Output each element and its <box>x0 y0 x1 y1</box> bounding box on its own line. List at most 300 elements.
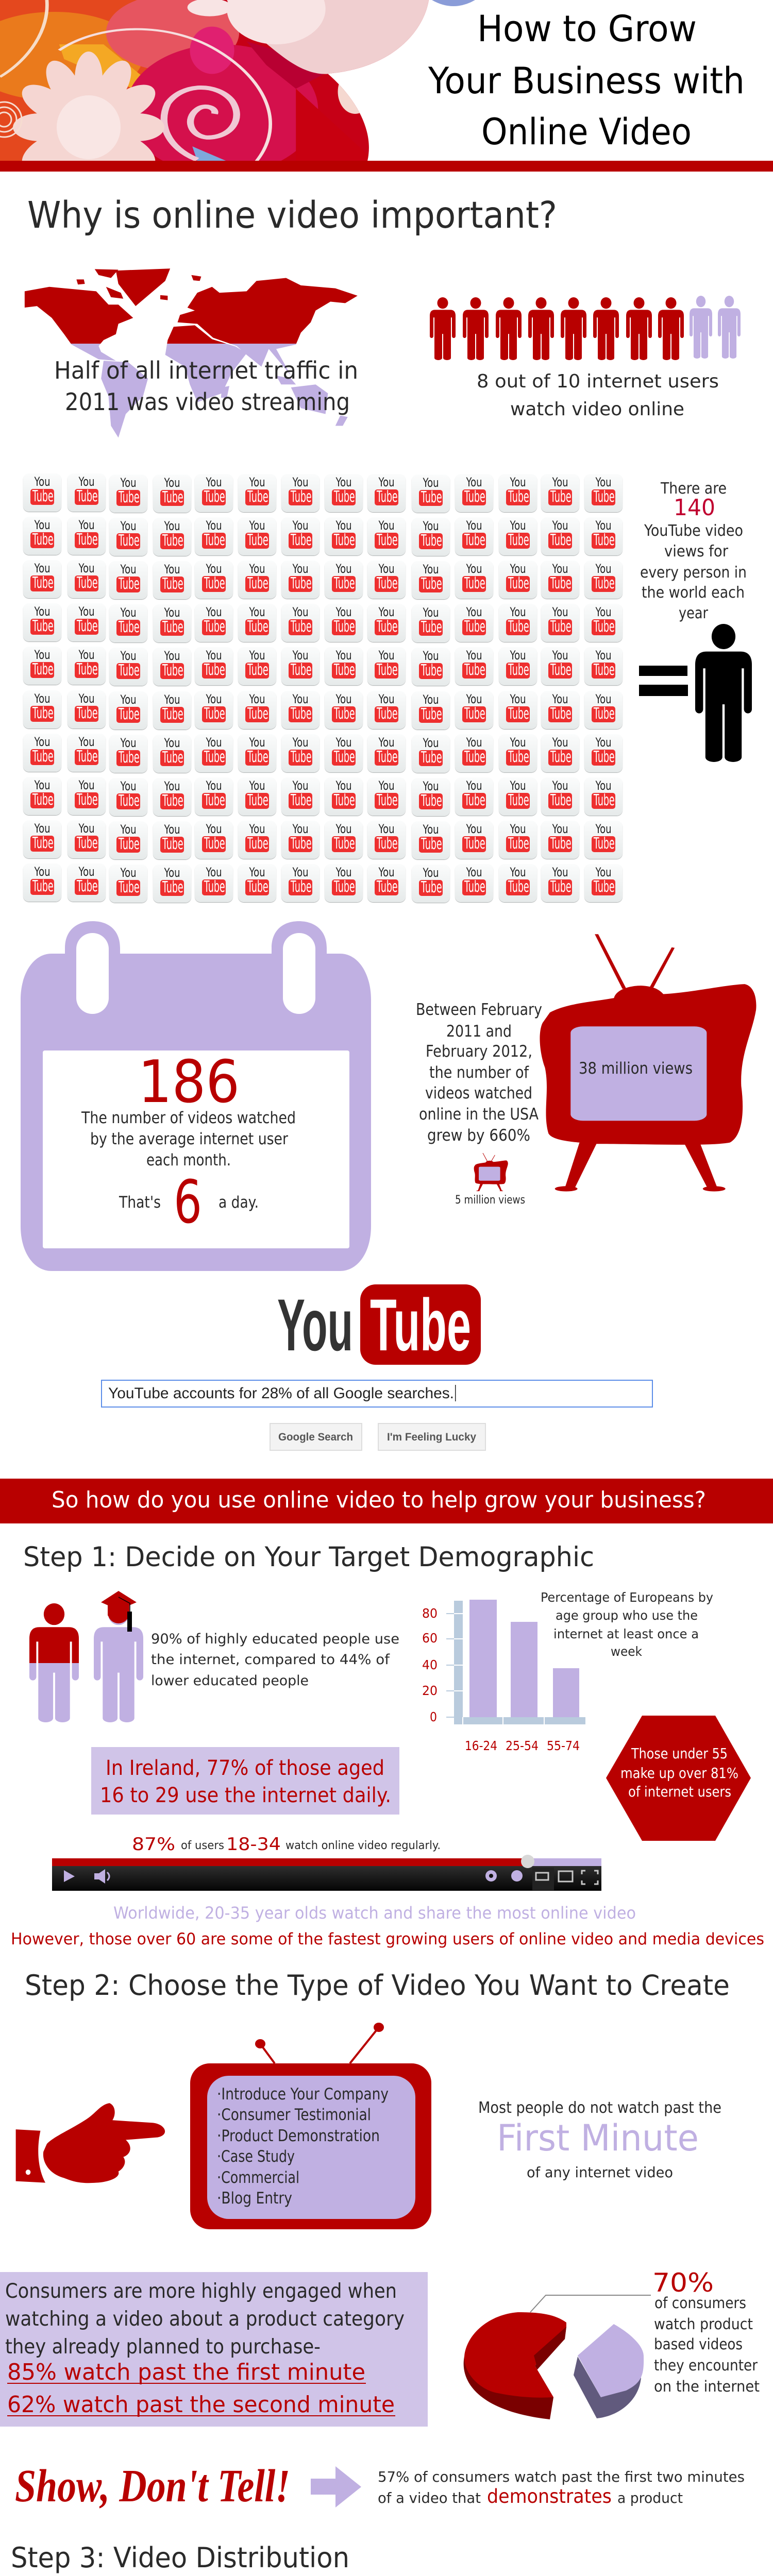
icon grid: 140 YouTube icons: Tube <box>421 532 442 550</box>
icon grid: 140 YouTube icons: Tube <box>334 705 355 723</box>
panel: calendar 186 videos: 6 <box>174 1168 202 1237</box>
icon grid: 140 YouTube icons: Tube <box>162 878 183 896</box>
icon grid: 140 YouTube icons: You <box>120 519 137 533</box>
icon grid: 140 YouTube icons: You <box>378 735 395 750</box>
icon grid: 140 YouTube icons: Tube <box>32 487 54 505</box>
icon grid: 140 YouTube icons: You <box>510 735 526 750</box>
icon grid: 140 YouTube icons: You <box>120 866 137 880</box>
icon grid: 140 YouTube icons: You <box>206 865 222 879</box>
icon: big TV 38 million views <box>540 934 756 1192</box>
panel: TV video types list <box>190 2023 431 2229</box>
icon grid: 140 YouTube icons: Tube <box>421 488 442 506</box>
icon grid: 140 YouTube icons: You <box>595 822 612 836</box>
icon grid: 140 YouTube icons: You <box>206 735 222 750</box>
icon grid: 140 YouTube icons <box>23 474 623 904</box>
icon grid: 140 YouTube icons: Tube <box>594 661 615 679</box>
icon grid: 140 YouTube icons: You <box>552 648 568 663</box>
icon grid: 140 YouTube icons: You <box>423 562 439 577</box>
icon grid: 140 YouTube icons: You <box>335 518 352 533</box>
icon grid: 140 YouTube icons: You <box>164 779 180 793</box>
icon: lower educated person <box>29 1603 79 1722</box>
icon grid: 140 YouTube icons: You <box>34 474 51 489</box>
icon grid: 140 YouTube icons: You <box>292 518 309 533</box>
icon grid: 140 YouTube icons: You <box>552 562 568 576</box>
icon grid: 140 YouTube icons: You <box>206 648 222 663</box>
callout: first minute: Most people do not watch past the <box>478 2099 721 2117</box>
text: growth 660 percent: videos watched <box>425 1084 532 1103</box>
icon grid: 140 YouTube icons: Tube <box>508 531 529 549</box>
icon: big TV 38 million views: 38 million views <box>579 1059 693 1078</box>
icon grid: 140 YouTube icons: Tube <box>32 791 54 809</box>
icon grid: 140 YouTube icons: You <box>423 736 439 750</box>
icon grid: 140 YouTube icons: Tube <box>334 835 355 853</box>
icon grid: 140 YouTube icons: You <box>510 562 526 576</box>
header artwork <box>0 0 429 161</box>
icon grid: 140 YouTube icons: You <box>423 519 439 533</box>
icon grid: 140 YouTube icons: You <box>78 518 95 532</box>
icon grid: 140 YouTube icons: You <box>466 648 482 663</box>
icon grid: 140 YouTube icons: Tube <box>291 748 312 766</box>
icon grid: 140 YouTube icons: Tube <box>204 488 225 506</box>
icon grid: 140 YouTube icons: Tube <box>204 878 225 896</box>
icon grid: 140 YouTube icons: You <box>292 822 309 836</box>
icon grid: 140 YouTube icons: Tube <box>334 661 355 679</box>
chart caption: age group who use the <box>556 1608 698 1623</box>
icon grid: 140 YouTube icons: You <box>164 866 180 880</box>
icon grid: 140 YouTube icons: Tube <box>421 618 442 636</box>
text: over 60 fastest growing: However, those over 60 are some of the fastest growing users of online video and media devices <box>11 1930 764 1948</box>
icon grid: 140 YouTube icons: You <box>335 865 352 879</box>
icon grid: 140 YouTube icons: You <box>423 779 439 793</box>
text: highly educated: the internet, compared to 44% of <box>151 1652 391 1668</box>
text: 87 percent of users: of users <box>181 1839 224 1852</box>
icon grid: 140 YouTube icons: You <box>249 475 265 489</box>
icon grid: 140 YouTube icons: You <box>78 474 95 489</box>
icon grid: 140 YouTube icons: Tube <box>421 792 442 810</box>
icon grid: 140 YouTube icons: Tube <box>464 878 485 896</box>
icon grid: 140 YouTube icons: Tube <box>77 574 98 592</box>
icon grid: 140 YouTube icons: You <box>34 648 51 662</box>
icon grid: 140 YouTube icons: You <box>206 822 222 836</box>
icon grid: 140 YouTube icons: Tube <box>291 488 312 506</box>
text: 70 percent of consumers: 70% <box>652 2268 714 2298</box>
icon: graduate person <box>94 1591 143 1722</box>
icon grid: 140 YouTube icons: Tube <box>32 748 54 766</box>
callout: Ireland internet use <box>91 1747 399 1815</box>
icon grid: 140 YouTube icons: Tube <box>377 488 398 506</box>
icon grid: 140 YouTube icons: Tube <box>162 488 183 506</box>
icon grid: 140 YouTube icons: Tube <box>377 618 398 636</box>
icon grid: 140 YouTube icons: Tube <box>421 878 442 896</box>
chart caption: week <box>611 1644 642 1659</box>
icon grid: 140 YouTube icons: Tube <box>162 662 183 680</box>
text: growth 660 percent <box>416 1001 542 1145</box>
icon grid: 140 YouTube icons: Tube <box>334 878 355 896</box>
icon grid: 140 YouTube icons: Tube <box>119 705 140 723</box>
icon grid: 140 YouTube icons: You <box>206 778 222 793</box>
panel: TV video types list: ·Product Demonstration <box>217 2127 380 2145</box>
icon grid: 140 YouTube icons: You <box>206 475 222 489</box>
icon grid: 140 YouTube icons: Tube <box>77 617 98 635</box>
text: growth 660 percent: online in the USA <box>419 1105 539 1124</box>
chart caption: internet at least once a <box>553 1626 699 1641</box>
icon grid: 140 YouTube icons: You <box>34 518 51 532</box>
icon grid: 140 YouTube icons: You <box>335 648 352 663</box>
icon grid: 140 YouTube icons: You <box>78 865 95 879</box>
icon grid: 140 YouTube icons: You <box>595 865 612 879</box>
callout: 140 views per person: There are <box>660 480 727 498</box>
icon grid: 140 YouTube icons: Tube <box>550 531 572 549</box>
icon grid: 140 YouTube icons: Tube <box>550 791 572 809</box>
text: 70 percent of consumers: watch product <box>654 2315 753 2333</box>
text: worldwide 20-35: Worldwide, 20-35 year olds watch and share the most online video <box>113 1903 636 1923</box>
chart caption <box>541 1590 713 1659</box>
icon grid: 140 YouTube icons: You <box>120 779 137 793</box>
icon grid: 140 YouTube icons: Tube <box>334 488 355 506</box>
icon grid: 140 YouTube icons: You <box>466 605 482 619</box>
title: Your Business with <box>428 60 745 102</box>
bar chart: Europeans by age group: 55-74 <box>547 1738 580 1753</box>
icon grid: 140 YouTube icons: You <box>120 649 137 663</box>
panel: TV video types list: ·Introduce Your Company <box>217 2085 389 2104</box>
icon grid: 140 YouTube icons: Tube <box>421 705 442 723</box>
button: Google Search: Google Search <box>278 1431 353 1443</box>
icon grid: 140 YouTube icons: Tube <box>119 835 140 853</box>
header red rule <box>0 161 773 172</box>
button: Google Search <box>270 1423 362 1450</box>
icon grid: 140 YouTube icons: Tube <box>594 705 615 723</box>
icon grid: 140 YouTube icons: You <box>292 605 309 619</box>
icon grid: 140 YouTube icons: Tube <box>464 705 485 723</box>
icon grid: 140 YouTube icons: You <box>206 692 222 706</box>
logo: YouTube: You <box>277 1284 353 1366</box>
icon grid: 140 YouTube icons: You <box>552 778 568 793</box>
icon grid: 140 YouTube icons: Tube <box>594 531 615 549</box>
icon grid: 140 YouTube icons: Tube <box>32 617 54 635</box>
icon grid: 140 YouTube icons: Tube <box>247 835 268 853</box>
panel: 8 out of 10 people: watch video online <box>510 399 684 420</box>
text: 87 percent of users: watch online video regularly. <box>285 1839 441 1852</box>
bar chart: Europeans by age group: 0 <box>430 1709 437 1724</box>
icon grid: 140 YouTube icons: Tube <box>119 575 140 593</box>
icon: small TV 5 million views: 5 million views <box>455 1194 525 1207</box>
icon grid: 140 YouTube icons: You <box>206 605 222 619</box>
logo: YouTube: Tube <box>370 1284 471 1366</box>
icon grid: 140 YouTube icons: Tube <box>550 748 572 766</box>
icon grid: 140 YouTube icons: You <box>34 865 51 879</box>
icon grid: 140 YouTube icons: You <box>249 518 265 533</box>
icon grid: 140 YouTube icons: You <box>34 561 51 575</box>
icon grid: 140 YouTube icons: Tube <box>247 878 268 896</box>
text: 70 percent of consumers: they encounter <box>654 2357 758 2374</box>
icon grid: 140 YouTube icons: You <box>378 518 395 533</box>
heading: step 1: Step 1: Decide on Your Target Demographic <box>23 1541 594 1573</box>
callout: 140 views per person: views for <box>664 543 729 561</box>
icon grid: 140 YouTube icons: You <box>510 778 526 793</box>
icon grid: 140 YouTube icons: You <box>595 692 612 706</box>
icon grid: 140 YouTube icons: Tube <box>377 531 398 549</box>
icon grid: 140 YouTube icons: Tube <box>247 618 268 636</box>
icon: small TV 5 million views <box>455 1153 525 1207</box>
icon grid: 140 YouTube icons: You <box>292 735 309 750</box>
callout: hexagon under 55: Those under 55 <box>631 1745 728 1762</box>
icon grid: 140 YouTube icons: You <box>249 648 265 663</box>
icon grid: 140 YouTube icons: Tube <box>594 791 615 809</box>
icon grid: 140 YouTube icons: Tube <box>550 488 572 506</box>
panel: TV video types list: ·Consumer Testimonial <box>217 2106 371 2124</box>
icon grid: 140 YouTube icons: Tube <box>291 835 312 853</box>
icon grid: 140 YouTube icons: Tube <box>464 574 485 592</box>
icon grid: 140 YouTube icons: You <box>249 735 265 750</box>
icon grid: 140 YouTube icons: You <box>292 865 309 879</box>
icon grid: 140 YouTube icons: Tube <box>162 792 183 810</box>
bar chart: Europeans by age group: 60 <box>422 1631 438 1646</box>
heading: why is online video important: Why is online video important? <box>27 194 557 236</box>
icon grid: 140 YouTube icons: You <box>552 692 568 706</box>
icon grid: 140 YouTube icons: You <box>335 692 352 706</box>
panel: engagement stats: 62% watch past the second minute <box>7 2392 395 2418</box>
panel: calendar 186 videos: The number of videos watched <box>81 1109 296 1127</box>
icon grid: 140 YouTube icons: Tube <box>464 488 485 506</box>
icon grid: 140 YouTube icons: You <box>378 648 395 663</box>
icon grid: 140 YouTube icons: Tube <box>247 661 268 679</box>
title: Online Video <box>481 111 692 153</box>
icon grid: 140 YouTube icons: Tube <box>334 748 355 766</box>
icon: pointing hand <box>16 2103 165 2183</box>
panel: world map half of traffic: Half of all internet traffic in <box>54 357 358 384</box>
icon grid: 140 YouTube icons: You <box>164 736 180 750</box>
icon grid: 140 YouTube icons: You <box>34 604 51 619</box>
icon grid: 140 YouTube icons: Tube <box>464 531 485 549</box>
icon grid: 140 YouTube icons: You <box>510 822 526 836</box>
icon grid: 140 YouTube icons: Tube <box>247 574 268 592</box>
bar chart: Europeans by age group: 16-24 <box>465 1738 497 1753</box>
icon grid: 140 YouTube icons: Tube <box>32 574 54 592</box>
icon grid: 140 YouTube icons: You <box>206 562 222 576</box>
callout: first minute: of any internet video <box>527 2164 673 2181</box>
icon grid: 140 YouTube icons: Tube <box>162 532 183 550</box>
text: highly educated: lower educated people <box>151 1673 309 1689</box>
icon grid: 140 YouTube icons: You <box>466 865 482 879</box>
pie chart: 70 percent <box>464 2295 651 2419</box>
icon grid: 140 YouTube icons: Tube <box>377 748 398 766</box>
panel: calendar 186 videos: a day. <box>219 1193 259 1212</box>
icon grid: 140 YouTube icons: You <box>335 778 352 793</box>
icon grid: 140 YouTube icons: Tube <box>594 748 615 766</box>
icon grid: 140 YouTube icons: You <box>423 476 439 490</box>
icon grid: 140 YouTube icons: Tube <box>247 705 268 723</box>
icon grid: 140 YouTube icons: You <box>206 518 222 533</box>
icon grid: 140 YouTube icons: Tube <box>119 878 140 896</box>
text: growth 660 percent: Between February <box>416 1001 542 1019</box>
callout: hexagon under 55: of internet users <box>628 1783 731 1800</box>
icon grid: 140 YouTube icons: You <box>595 518 612 533</box>
callout: first minute: First Minute <box>497 2117 699 2159</box>
button: I'm Feeling Lucky: I'm Feeling Lucky <box>387 1431 476 1443</box>
icon grid: 140 YouTube icons: Tube <box>204 705 225 723</box>
icon grid: 140 YouTube icons: You <box>595 562 612 576</box>
text: 57 percent demonstrates: demonstrates <box>487 2485 612 2507</box>
icon grid: 140 YouTube icons: You <box>335 562 352 576</box>
icon grid: 140 YouTube icons: Tube <box>77 487 98 505</box>
icon grid: 140 YouTube icons: Tube <box>464 618 485 636</box>
icon grid: 140 YouTube icons: You <box>378 562 395 576</box>
icon grid: 140 YouTube icons: You <box>595 648 612 663</box>
icon grid: 140 YouTube icons: You <box>378 822 395 836</box>
icon grid: 140 YouTube icons: You <box>466 822 482 836</box>
icon grid: 140 YouTube icons: Tube <box>204 835 225 853</box>
icon: black person <box>695 624 752 762</box>
icon grid: 140 YouTube icons: Tube <box>119 618 140 636</box>
icon grid: 140 YouTube icons: Tube <box>550 878 572 896</box>
text: 57 percent demonstrates: of a video that <box>378 2489 481 2506</box>
icon grid: 140 YouTube icons: You <box>510 692 526 706</box>
icon grid: 140 YouTube icons: Tube <box>550 618 572 636</box>
icon grid: 140 YouTube icons: Tube <box>594 618 615 636</box>
panel: world map half of traffic <box>25 268 358 438</box>
icon grid: 140 YouTube icons: You <box>466 475 482 489</box>
callout: Ireland internet use: In Ireland, 77% of those aged <box>106 1756 384 1780</box>
bar chart: Europeans by age group: 25-54 <box>506 1738 539 1753</box>
icon grid: 140 YouTube icons: You <box>292 692 309 706</box>
text: 70 percent of consumers: on the internet <box>654 2378 760 2395</box>
icon grid: 140 YouTube icons: Tube <box>77 791 98 809</box>
icon grid: 140 YouTube icons: Tube <box>550 661 572 679</box>
icon grid: 140 YouTube icons: Tube <box>162 705 183 723</box>
icon grid: 140 YouTube icons: You <box>120 562 137 577</box>
icon grid: 140 YouTube icons: Tube <box>377 835 398 853</box>
panel: calendar 186 videos: 186 <box>138 1048 240 1116</box>
icon grid: 140 YouTube icons: You <box>249 562 265 576</box>
icon grid: 140 YouTube icons: You <box>120 605 137 620</box>
icon grid: 140 YouTube icons: Tube <box>550 574 572 592</box>
icon grid: 140 YouTube icons: Tube <box>204 748 225 766</box>
callout: 140 views per person: 140 <box>674 495 715 521</box>
callout: Ireland internet use: 16 to 29 use the internet daily. <box>100 1784 391 1807</box>
icon grid: 140 YouTube icons: You <box>292 778 309 793</box>
icon grid: 140 YouTube icons: You <box>510 518 526 533</box>
icon grid: 140 YouTube icons: You <box>335 475 352 489</box>
icon grid: 140 YouTube icons: Tube <box>247 791 268 809</box>
icon grid: 140 YouTube icons: Tube <box>247 748 268 766</box>
bar chart: Europeans by age group: 80 <box>422 1606 438 1621</box>
icon grid: 140 YouTube icons: Tube <box>550 835 572 853</box>
icon grid: 140 YouTube icons: You <box>378 865 395 879</box>
text: highly educated: 90% of highly educated people use <box>151 1631 399 1647</box>
icon grid: 140 YouTube icons: Tube <box>162 749 183 767</box>
icon grid: 140 YouTube icons: Tube <box>119 749 140 767</box>
callout: first minute <box>478 2099 721 2181</box>
panel: engagement stats: Consumers are more highly engaged when <box>5 2280 397 2303</box>
icon grid: 140 YouTube icons: Tube <box>32 704 54 722</box>
text: 87 percent of users <box>132 1834 441 1855</box>
icon grid: 140 YouTube icons: You <box>292 562 309 576</box>
icon grid: 140 YouTube icons: Tube <box>204 618 225 636</box>
icon grid: 140 YouTube icons: Tube <box>594 488 615 506</box>
icon grid: 140 YouTube icons: You <box>552 475 568 489</box>
icon grid: 140 YouTube icons: Tube <box>508 791 529 809</box>
icon grid: 140 YouTube icons: You <box>378 692 395 706</box>
icon grid: 140 YouTube icons: Tube <box>594 878 615 896</box>
icon grid: 140 YouTube icons: You <box>34 778 51 792</box>
icon grid: 140 YouTube icons: You <box>510 605 526 619</box>
text: 87 percent of users: 87% <box>132 1834 175 1855</box>
bar chart: Europeans by age group: 20 <box>422 1683 438 1698</box>
panel: engagement stats <box>0 2272 428 2427</box>
text: growth 660 percent: February 2012, <box>426 1042 532 1061</box>
title: How to Grow <box>477 8 697 50</box>
icon grid: 140 YouTube icons: Tube <box>421 749 442 767</box>
icon grid: 140 YouTube icons: You <box>164 649 180 663</box>
panel: world map half of traffic: 2011 was video streaming <box>65 388 350 416</box>
icon grid: 140 YouTube icons: Tube <box>334 618 355 636</box>
icon grid: 140 YouTube icons: You <box>510 648 526 663</box>
icon grid: 140 YouTube icons: Tube <box>508 835 529 853</box>
icon grid: 140 YouTube icons: Tube <box>377 661 398 679</box>
icon grid: 140 YouTube icons: Tube <box>377 574 398 592</box>
icon grid: 140 YouTube icons: Tube <box>119 662 140 680</box>
chart caption: Percentage of Europeans by <box>541 1590 713 1605</box>
icon grid: 140 YouTube icons: You <box>292 648 309 663</box>
icon grid: 140 YouTube icons: You <box>595 735 612 750</box>
icon grid: 140 YouTube icons: Tube <box>291 531 312 549</box>
icon grid: 140 YouTube icons: Tube <box>377 705 398 723</box>
icon grid: 140 YouTube icons: You <box>552 518 568 533</box>
icon grid: 140 YouTube icons: You <box>552 605 568 619</box>
text: 57 percent demonstrates: 57% of consumers watch past the first two minutes <box>378 2468 745 2485</box>
icon grid: 140 YouTube icons: You <box>466 562 482 576</box>
icon grid: 140 YouTube icons: Tube <box>291 705 312 723</box>
logo: YouTube <box>277 1284 481 1366</box>
text: 70 percent of consumers: of consumers <box>654 2294 746 2312</box>
icon grid: 140 YouTube icons: Tube <box>508 878 529 896</box>
icon grid: 140 YouTube icons: You <box>120 822 137 837</box>
icon grid: 140 YouTube icons: You <box>552 865 568 879</box>
icon grid: 140 YouTube icons: You <box>78 604 95 619</box>
icon grid: 140 YouTube icons: Tube <box>119 488 140 506</box>
panel: engagement stats: 85% watch past the first minute <box>7 2359 365 2385</box>
callout: 140 views per person: year <box>679 604 709 622</box>
callout: 140 views per person: the world each <box>642 584 745 602</box>
icon grid: 140 YouTube icons: You <box>378 605 395 619</box>
icon grid: 140 YouTube icons: You <box>423 605 439 620</box>
panel: 8 out of 10 people <box>430 296 741 420</box>
panel: TV video types list: ·Commercial <box>217 2168 299 2187</box>
icon grid: 140 YouTube icons: Tube <box>464 748 485 766</box>
icon grid: 140 YouTube icons: Tube <box>204 531 225 549</box>
icon grid: 140 YouTube icons: Tube <box>162 618 183 636</box>
icon grid: 140 YouTube icons: Tube <box>421 575 442 593</box>
icon grid: 140 YouTube icons: You <box>78 691 95 706</box>
text: 70 percent of consumers: based videos <box>654 2335 743 2353</box>
text: 57 percent demonstrates: a product <box>617 2489 683 2506</box>
icon grid: 140 YouTube icons: Tube <box>594 835 615 853</box>
bar chart: Europeans by age group: 40 <box>422 1657 438 1672</box>
icon grid: 140 YouTube icons: You <box>378 778 395 793</box>
icon grid: 140 YouTube icons: Tube <box>508 748 529 766</box>
icon grid: 140 YouTube icons: You <box>164 822 180 837</box>
callout: hexagon under 55 <box>606 1716 751 1841</box>
icon grid: 140 YouTube icons: Tube <box>162 575 183 593</box>
icon grid: 140 YouTube icons: Tube <box>464 661 485 679</box>
icon grid: 140 YouTube icons: You <box>335 735 352 750</box>
icon grid: 140 YouTube icons: You <box>34 691 51 706</box>
icon grid: 140 YouTube icons: You <box>335 822 352 836</box>
icon grid: 140 YouTube icons: Tube <box>550 705 572 723</box>
bar chart: Europeans by age group <box>422 1600 585 1753</box>
icon grid: 140 YouTube icons: You <box>164 605 180 620</box>
search box: YouTube accounts for 28% of all Google searches. <box>108 1385 454 1402</box>
